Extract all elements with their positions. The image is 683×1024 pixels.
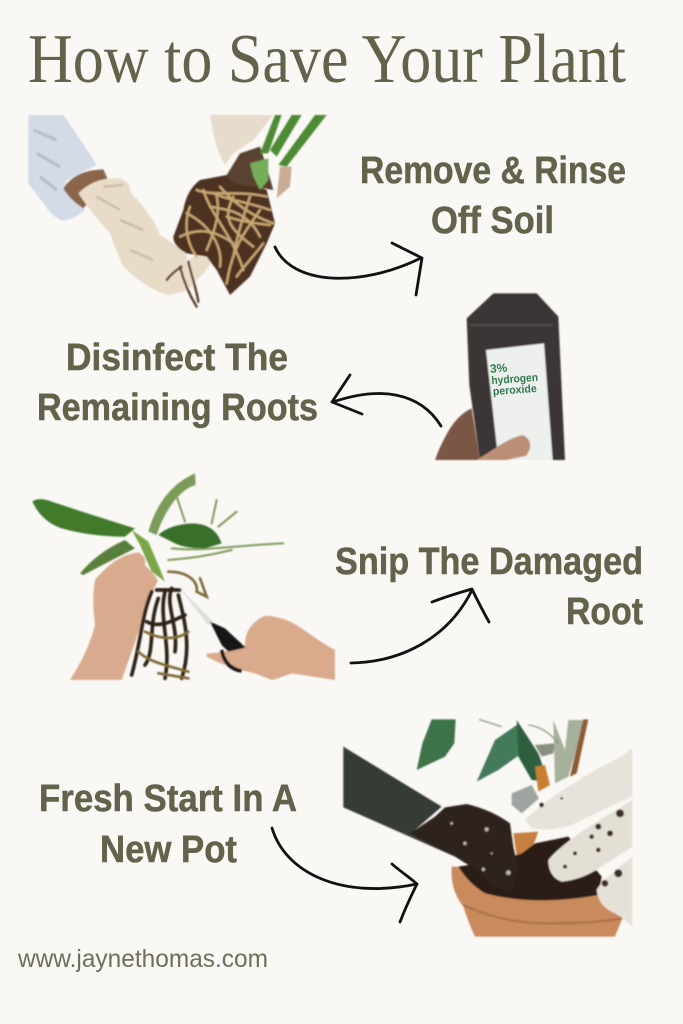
heading: remove and rinse [360, 150, 626, 242]
heading: snip: Root [566, 591, 643, 633]
label text: 3% [489, 361, 508, 376]
photo: hydrogen peroxide bottle [435, 293, 565, 460]
arrow: fresh start to pot [272, 828, 417, 922]
arrow: scissors to snip heading [351, 589, 489, 663]
label text: hydrogen [491, 372, 539, 387]
heading: snip: Snip The Damaged [335, 541, 643, 583]
label text [489, 359, 539, 398]
heading: snip [335, 541, 643, 633]
heading: fresh start [39, 778, 297, 871]
photo: gloved hands holding roots [28, 115, 327, 307]
heading: disinfect: Remaining Roots [37, 387, 318, 429]
heading: remove and rinse: Remove & Rinse [360, 150, 626, 192]
heading: disinfect [37, 337, 318, 429]
heading: fresh start: New Pot [100, 829, 237, 871]
photo: snipping orchid roots [32, 473, 335, 680]
arrow: bottle to disinfect heading [332, 375, 441, 426]
label text: peroxide [492, 383, 537, 398]
heading: disinfect: Disinfect The [66, 337, 288, 379]
heading: remove and rinse: Off Soil [431, 200, 554, 242]
photo: repotting with soil scoop [343, 719, 632, 937]
arrow: roots to remove heading [275, 243, 422, 295]
heading: fresh start: Fresh Start In A [39, 778, 297, 820]
website url: www.jaynethomas.com [17, 945, 268, 973]
title: How to Save Your Plant [28, 21, 626, 98]
